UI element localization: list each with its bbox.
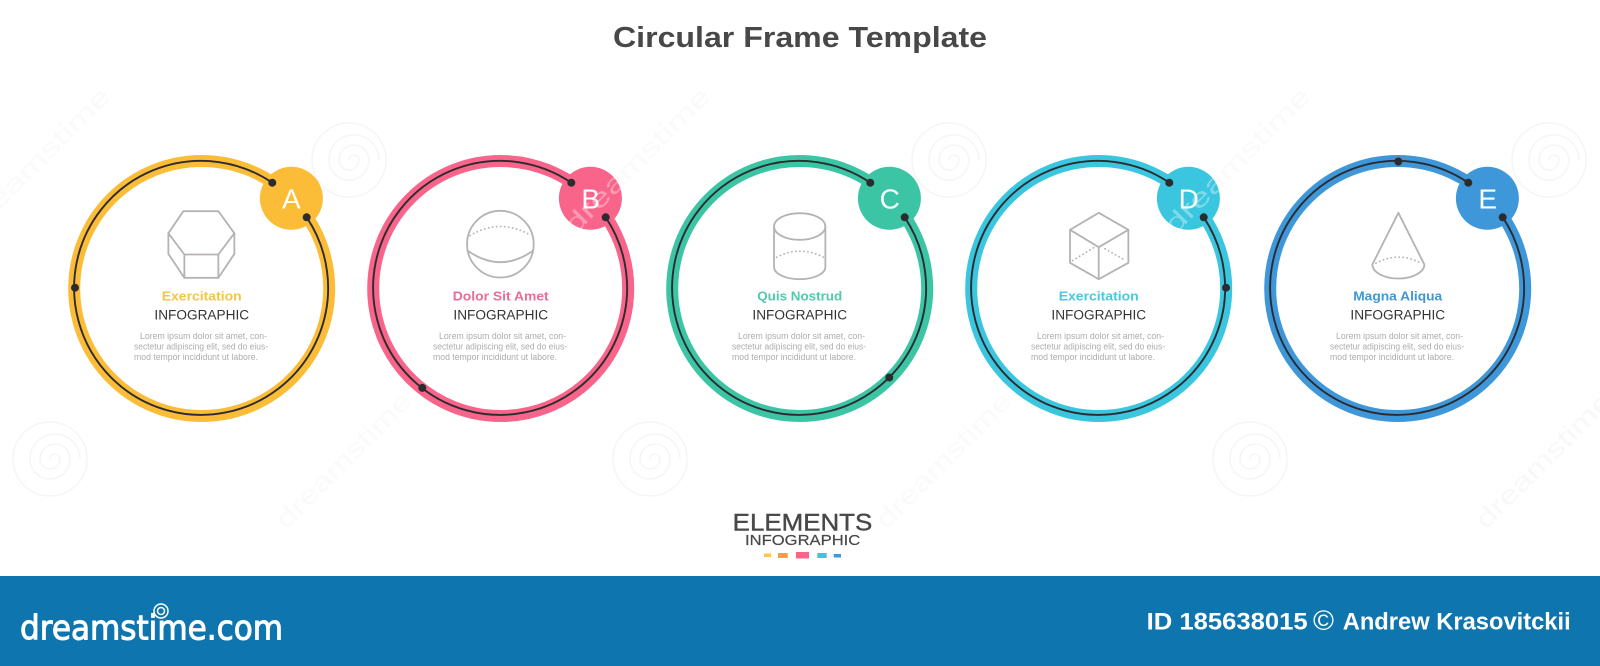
heading B: Dolor Sit Amet — [453, 288, 549, 304]
badge E — [1456, 167, 1519, 230]
watermark spirals — [13, 123, 1586, 496]
connector line B — [373, 161, 627, 415]
watermark text, overlay on coloured shapes: dreamstime — [1158, 81, 1316, 239]
badge E: E — [1478, 184, 1497, 214]
body text E — [1330, 331, 1464, 362]
title: Circular Frame Template — [613, 22, 987, 54]
body text C: Lorem ipsum dolor sit amet, con- — [738, 331, 865, 341]
body text C — [732, 331, 866, 362]
body text B: sectetur adipiscing elit, sed do eius- — [433, 342, 567, 352]
elements infographic logo: ELEMENTS — [733, 510, 872, 537]
body text A: mod tempor incididunt ut labore. — [134, 352, 258, 362]
badge A — [260, 167, 323, 230]
icon: cube — [1070, 213, 1128, 279]
panel: E Magna Aliqua — [1270, 158, 1525, 416]
body text D: Lorem ipsum dolor sit amet, con- — [1037, 331, 1164, 341]
body text A — [134, 331, 268, 362]
body text B — [433, 331, 567, 362]
panel: B Dolor Sit Amet — [373, 161, 628, 416]
elements infographic logo: INFOGRAPHIC — [745, 532, 860, 549]
icon: sphere — [467, 211, 534, 278]
badge D: D — [1179, 184, 1199, 214]
footer credit: ID 185638015 — [1147, 608, 1308, 635]
badge A: A — [282, 184, 301, 214]
heading C: Quis Nostrud — [757, 288, 842, 304]
footer credit: © — [1313, 605, 1334, 636]
footer credit: Andrew Krasovitckii — [1343, 608, 1571, 635]
panel: D Exercitation — [971, 161, 1230, 416]
icon: cone — [1372, 213, 1424, 279]
connector line C — [672, 161, 926, 415]
watermark text, background layer: dreamstime — [1469, 386, 1600, 534]
watermark text, background layer: dreamstime — [558, 81, 716, 239]
watermark text, overlay on coloured shapes: dreamstime — [269, 386, 418, 534]
body text D — [1031, 331, 1165, 362]
connector line A — [71, 161, 328, 415]
body text D: sectetur adipiscing elit, sed do eius- — [1031, 342, 1165, 352]
panel: A Exercitation — [71, 161, 329, 416]
ring B — [373, 161, 628, 416]
footer credit — [1147, 605, 1571, 636]
ring D — [971, 161, 1226, 416]
icon: cylinder — [774, 213, 825, 279]
heading E: Magna Aliqua — [1353, 288, 1443, 304]
heading D: Exercitation — [1059, 288, 1139, 304]
body text B: mod tempor incididunt ut labore. — [433, 352, 557, 362]
elements infographic logo — [733, 510, 872, 558]
badge B: B — [581, 184, 600, 214]
subheading C: INFOGRAPHIC — [752, 308, 847, 322]
subheading D: INFOGRAPHIC — [1051, 308, 1146, 322]
heading A: Exercitation — [162, 288, 242, 304]
watermark text, overlay on coloured shapes: dreamstime — [558, 81, 716, 239]
icon: spiral — [154, 604, 168, 618]
watermark text, background layer: dreamstime — [269, 386, 418, 534]
watermark text, background layer — [0, 81, 1600, 534]
footer bar — [0, 576, 1600, 666]
body text A: Lorem ipsum dolor sit amet, con- — [140, 331, 267, 341]
badge D — [1157, 167, 1220, 230]
subheading A: INFOGRAPHIC — [154, 308, 249, 322]
subheading B: INFOGRAPHIC — [453, 308, 548, 322]
body text C: sectetur adipiscing elit, sed do eius- — [732, 342, 866, 352]
connector line D — [971, 161, 1230, 415]
badge C — [858, 167, 921, 230]
body text E: mod tempor incididunt ut labore. — [1330, 352, 1454, 362]
footer logo: dreamstime.com: dreamstime.com — [20, 608, 283, 648]
body text E: Lorem ipsum dolor sit amet, con- — [1336, 331, 1463, 341]
panel: C Quis Nostrud — [672, 161, 927, 416]
ring A — [74, 161, 329, 416]
badge C: C — [880, 184, 900, 214]
watermark text, overlay on coloured shapes — [0, 81, 1316, 534]
ring C — [672, 161, 927, 416]
watermark text, background layer: dreamstime — [1158, 81, 1316, 239]
body text A: sectetur adipiscing elit, sed do eius- — [134, 342, 268, 352]
body text C: mod tempor incididunt ut labore. — [732, 352, 856, 362]
ring E — [1270, 161, 1525, 416]
badge B — [559, 167, 622, 230]
body text E: sectetur adipiscing elit, sed do eius- — [1330, 342, 1464, 352]
icon: hexagonal prism — [168, 211, 234, 278]
body text D: mod tempor incididunt ut labore. — [1031, 352, 1155, 362]
connector line E — [1270, 158, 1524, 415]
subheading E: INFOGRAPHIC — [1350, 308, 1445, 322]
body text B: Lorem ipsum dolor sit amet, con- — [439, 331, 566, 341]
watermark text, background layer: dreamstime — [869, 386, 1018, 534]
watermark text, overlay on coloured shapes: dreamstime — [869, 386, 1018, 534]
colour bars — [764, 552, 841, 558]
